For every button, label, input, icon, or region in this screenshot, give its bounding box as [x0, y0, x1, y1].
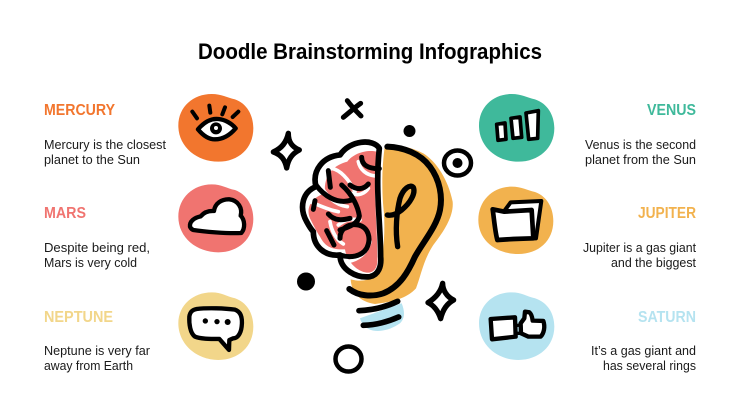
text: saturn description: has several rings [603, 359, 696, 373]
text: mercury description: planet to the Sun [44, 153, 140, 167]
icon: cloud on red blob [178, 184, 253, 252]
icon: lightbulb and brain [303, 142, 453, 331]
text: mercury description: Mercury is the closest [44, 138, 167, 152]
heading: mars: MARS [44, 205, 86, 222]
text: jupiter description: and the biggest [611, 256, 697, 270]
text: neptune description: Neptune is very far [44, 344, 150, 358]
text: mars description: Mars is very cold [44, 256, 137, 270]
heading: venus: VENUS [647, 102, 696, 119]
text: neptune description: away from Earth [44, 359, 133, 373]
icon: sparkle right [428, 283, 454, 319]
icon: sparkle left [273, 133, 299, 168]
text: mars description: Despite being red, [44, 241, 150, 255]
bulb screw threads [359, 301, 399, 325]
heading: saturn: SATURN [638, 309, 696, 326]
panel: mars text [44, 205, 150, 270]
icon: big dot left [297, 272, 315, 290]
icon: ring bottom [336, 346, 362, 372]
icon: small dot top [404, 125, 416, 137]
brain fill [303, 142, 381, 277]
title: Doodle Brainstorming Infographics [198, 39, 542, 64]
panel: jupiter text [583, 205, 697, 270]
icon: bar chart on green blob [479, 94, 554, 162]
heading: neptune: NEPTUNE [44, 309, 113, 326]
icon: speech bubble on yellow blob [178, 292, 253, 360]
panel: venus text [585, 102, 696, 167]
text: saturn description: It’s a gas giant and [591, 344, 696, 358]
heading: jupiter: JUPITER [638, 205, 696, 222]
filament [387, 186, 414, 247]
brain swirls white [310, 162, 375, 262]
icon: eye on orange blob [178, 94, 253, 162]
bulb base fill [360, 303, 404, 331]
brain folds [313, 157, 379, 257]
panel: neptune text [44, 309, 150, 373]
bulb outline [349, 147, 441, 296]
brain pink [309, 151, 377, 273]
text: venus description: Venus is the second [585, 138, 696, 152]
icon: x doodle [343, 101, 361, 117]
icon: thumbs up on blue blob [479, 292, 554, 360]
panel: mercury text [44, 102, 167, 167]
icon: folder on orange blob [478, 187, 553, 254]
text: jupiter description: Jupiter is a gas giant [583, 241, 697, 255]
bulb fill [351, 145, 453, 304]
panel: saturn text [591, 309, 696, 373]
heading: mercury: MERCURY [44, 102, 115, 119]
icon: ring with dot [444, 150, 471, 176]
text: venus description: planet from the Sun [585, 153, 696, 167]
brain outline [303, 142, 381, 277]
